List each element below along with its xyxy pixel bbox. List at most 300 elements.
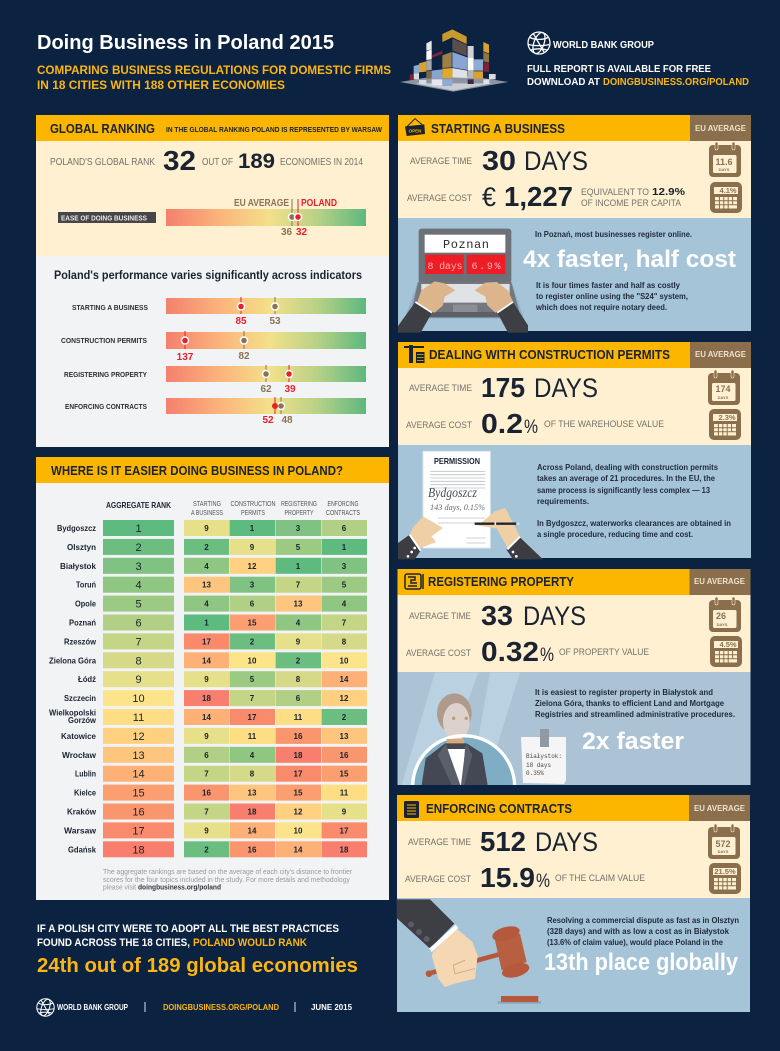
story text: It is easiest to register property in Białystok and bbox=[535, 688, 713, 697]
story text: It is four times faster and half as costly bbox=[536, 281, 681, 290]
column headers bbox=[106, 500, 360, 517]
sticky note bbox=[521, 729, 566, 784]
footer link: DOINGBUSINESS.ORG/POLAND bbox=[163, 1003, 279, 1012]
average cost bbox=[407, 181, 686, 212]
header bar bbox=[397, 795, 689, 821]
icon: property plan bbox=[405, 574, 423, 589]
EU average tab bbox=[690, 115, 751, 141]
story text: In Poznań, most businesses register online. bbox=[535, 230, 692, 239]
panel: starting a business bbox=[398, 115, 751, 333]
indicator: registering property: 39 bbox=[284, 384, 296, 395]
story text: Zielona Góra, thanks to efficient Land and Mortgage bbox=[535, 699, 725, 708]
row: Kielce: 11 bbox=[340, 789, 349, 798]
screen days text: 8 days bbox=[428, 261, 462, 273]
footnote: doingbusiness.org/poland bbox=[138, 884, 221, 892]
indicator: registering property: REGISTERING PROPERTY bbox=[64, 370, 147, 379]
row: Gdańsk: 2 bbox=[204, 845, 209, 854]
row: Lublin: Lublin bbox=[75, 769, 96, 779]
icon: EU time calendar: 572 bbox=[715, 839, 731, 849]
story text: which does not require notary deed. bbox=[535, 303, 667, 312]
heading: ENFORCING CONTRACTS bbox=[426, 801, 572, 816]
row: Zielona Góra: Zielona Góra bbox=[49, 655, 96, 665]
row: Szczecin: 18 bbox=[202, 694, 211, 703]
title: Doing Business in Poland 2015 bbox=[37, 32, 334, 54]
story text: 2x faster bbox=[582, 728, 684, 755]
row: Zielona Góra: 14 bbox=[202, 656, 211, 665]
row: Toruń: 5 bbox=[342, 581, 347, 590]
row: Wielkopolski Gorzów: 2 bbox=[342, 713, 347, 722]
row: Zielona Góra: 2 bbox=[296, 656, 301, 665]
average time: 512 bbox=[480, 826, 526, 857]
EU average label: EU AVERAGE bbox=[695, 349, 746, 359]
row: Wielkopolski Gorzów: 11 bbox=[133, 712, 144, 724]
row: Bydgoszcz: 9 bbox=[204, 524, 209, 533]
column headers: AGGREGATE RANK bbox=[106, 500, 172, 510]
header note: IN THE GLOBAL RANKING POLAND IS REPRESENTED BY WARSAW bbox=[166, 125, 383, 134]
row: Wielkopolski Gorzów: 11 bbox=[294, 713, 303, 722]
total economies: 189 bbox=[238, 150, 275, 173]
indicator: starting a business: 85 bbox=[235, 316, 247, 327]
row: Wrocław: 6 bbox=[204, 751, 209, 760]
icon: EU cost calculator: 21.5% bbox=[714, 867, 736, 876]
row: Kraków: 7 bbox=[204, 808, 209, 816]
icon: EU time calendar bbox=[709, 142, 741, 177]
average time: AVERAGE TIME bbox=[409, 383, 472, 394]
EU value: 36 bbox=[281, 227, 293, 238]
row: Rzeszów: 17 bbox=[202, 637, 211, 646]
icon: EU cost calculator: 4.1% bbox=[719, 186, 737, 195]
row: Gdańsk: 18 bbox=[132, 844, 145, 856]
sticky note: Białystok: bbox=[526, 753, 562, 760]
report note line 1: FULL REPORT IS AVAILABLE FOR FREE bbox=[527, 63, 711, 75]
EU average label: EU AVERAGE bbox=[694, 803, 745, 813]
panel header bbox=[36, 457, 389, 483]
callout: best practices: IF A POLISH CITY WERE TO ADOPT ALL THE BEST PRACTICES bbox=[37, 923, 339, 935]
row: Warsaw: 14 bbox=[248, 826, 257, 835]
row: Szczecin: 12 bbox=[340, 694, 349, 703]
illustration panel background bbox=[398, 672, 750, 785]
icon: EU cost calculator bbox=[710, 636, 742, 667]
suffix: ECONOMIES IN 2014 bbox=[280, 157, 363, 168]
row: Lublin: 17 bbox=[294, 770, 303, 779]
row: Bydgoszcz bbox=[57, 520, 367, 536]
sticky note: 18 days bbox=[526, 762, 551, 769]
stats background bbox=[398, 141, 751, 218]
header bar bbox=[398, 569, 690, 595]
story text bbox=[544, 916, 739, 976]
row: Toruń: 4 bbox=[135, 580, 142, 592]
average time: DAYS bbox=[524, 146, 588, 176]
row: Olsztyn: 9 bbox=[250, 543, 255, 552]
row: Zielona Góra: 10 bbox=[340, 656, 349, 665]
icon: globe bbox=[36, 998, 55, 1017]
row: Katowice: 16 bbox=[294, 732, 303, 741]
column headers: CONTRACTS bbox=[326, 510, 360, 517]
rank sentence bbox=[50, 145, 363, 176]
row: Opole: Opole bbox=[75, 599, 96, 609]
row: Zielona Góra: 10 bbox=[248, 656, 257, 665]
icon: EU time calendar bbox=[708, 824, 740, 859]
story text: Registries and streamlined administrative procedures. bbox=[535, 710, 735, 719]
story text: Resolving a commercial dispute as fast as in Olsztyn bbox=[547, 916, 739, 925]
icon: EU time calendar: 174 bbox=[715, 384, 731, 394]
story text: Across Poland, dealing with construction permits bbox=[537, 463, 719, 472]
row: Opole: 13 bbox=[294, 600, 303, 609]
indicator: enforcing contracts: 52 bbox=[262, 415, 274, 426]
row: Szczecin: 10 bbox=[132, 693, 145, 705]
EU marker bbox=[288, 199, 296, 226]
icon: EU cost calculator bbox=[710, 182, 742, 213]
icon: EU cost calculator: 2.3% bbox=[718, 413, 736, 422]
average time: DAYS bbox=[535, 827, 598, 857]
row: Poznań: 6 bbox=[135, 618, 142, 630]
row: Wielkopolski Gorzów: Gorzów bbox=[68, 715, 96, 725]
row: Olsztyn: 5 bbox=[296, 543, 301, 552]
average cost: % bbox=[524, 417, 538, 438]
story text: (13.6% of claim value), would place Poland in the bbox=[547, 938, 724, 947]
panel header bbox=[36, 115, 389, 141]
indicator: starting a business: STARTING A BUSINESS bbox=[72, 303, 148, 312]
heading: DEALING WITH CONSTRUCTION PERMITS bbox=[429, 347, 670, 362]
EU average tab bbox=[690, 569, 750, 595]
column headers: CONSTRUCTION bbox=[230, 501, 276, 508]
illustration: property officer bbox=[402, 672, 520, 785]
row: Opole: 4 bbox=[342, 600, 347, 609]
indicator: registering property: 62 bbox=[260, 384, 272, 395]
row: Poznań: 4 bbox=[296, 618, 301, 628]
footer date: JUNE 2015 bbox=[311, 1003, 353, 1012]
row: Kielce: 15 bbox=[132, 788, 145, 800]
Poland legend: POLAND bbox=[301, 198, 337, 209]
illustration panel background bbox=[397, 898, 750, 1012]
story text: 4x faster, half cost bbox=[523, 246, 736, 273]
row: Łódź: 14 bbox=[340, 675, 349, 684]
report note line 2: DOWNLOAD AT bbox=[527, 76, 601, 88]
sticky note: 0.35% bbox=[526, 770, 544, 777]
row: Bydgoszcz: 6 bbox=[342, 524, 347, 533]
average time: DAYS bbox=[534, 373, 598, 403]
row: Szczecin: 6 bbox=[296, 694, 301, 703]
row: Bydgoszcz: 1 bbox=[250, 524, 255, 533]
column headers: A BUSINESS bbox=[191, 510, 223, 517]
row: Poznań bbox=[69, 614, 367, 630]
indicator: enforcing contracts: ENFORCING CONTRACTS bbox=[65, 402, 147, 411]
EU average tab bbox=[689, 795, 750, 821]
panel body bbox=[36, 457, 389, 900]
row: Katowice: 12 bbox=[132, 731, 145, 743]
icon: contract document bbox=[404, 801, 419, 818]
row: Kraków: Kraków bbox=[67, 806, 96, 816]
icon: EU cost calculator bbox=[709, 863, 741, 894]
average time: AVERAGE TIME bbox=[409, 611, 471, 622]
row label text: EASE OF DOING BUSINESS bbox=[61, 214, 147, 222]
row: Warsaw: 10 bbox=[294, 826, 303, 835]
row: Warsaw: 17 bbox=[340, 826, 349, 835]
average cost bbox=[406, 636, 649, 667]
row: Olsztyn: Olsztyn bbox=[67, 542, 96, 552]
row: Warsaw: 17 bbox=[132, 825, 145, 837]
average cost: 0.2 bbox=[481, 408, 523, 439]
connector: OUT OF bbox=[202, 157, 233, 168]
row: Rzeszów: 9 bbox=[296, 637, 301, 646]
row: Opole: 6 bbox=[250, 600, 255, 609]
icon: colourful building logo bbox=[400, 29, 508, 92]
story text: 13th place globally bbox=[544, 949, 739, 976]
story text bbox=[537, 463, 731, 539]
average time bbox=[409, 600, 586, 631]
row: Białystok: 3 bbox=[135, 561, 142, 573]
icon: crane bbox=[404, 345, 424, 363]
icon: EU time calendar bbox=[709, 597, 741, 632]
average cost: AVERAGE COST bbox=[406, 420, 472, 431]
row: Gdańsk: 16 bbox=[248, 845, 257, 854]
average cost bbox=[405, 862, 645, 893]
rank number: 32 bbox=[163, 145, 196, 176]
ease of doing business chart bbox=[58, 198, 366, 238]
row: Poznań: Poznań bbox=[69, 618, 96, 628]
row: Lublin: 15 bbox=[340, 770, 349, 779]
indicator: enforcing contracts bbox=[65, 397, 366, 426]
row: Olsztyn bbox=[67, 539, 367, 555]
story text bbox=[535, 688, 735, 755]
footer bbox=[37, 998, 353, 1017]
row: Lublin: 7 bbox=[204, 770, 209, 779]
icon: EU time calendar: DAYS bbox=[718, 849, 729, 854]
icon: EU cost calculator bbox=[709, 409, 741, 440]
row: Warsaw bbox=[64, 822, 367, 838]
gray section bbox=[36, 256, 389, 447]
row: Kraków: 18 bbox=[248, 808, 257, 816]
story text bbox=[523, 230, 736, 312]
story text: a single procedure, reducing time and cost. bbox=[537, 530, 693, 539]
icon: EU time calendar bbox=[708, 370, 740, 405]
callout: best practices bbox=[37, 923, 358, 977]
story text: same process is significantly less complex — 13 bbox=[537, 486, 711, 495]
row: Katowice: Katowice bbox=[61, 731, 96, 741]
logo wordmark: WORLD BANK GROUP bbox=[553, 39, 654, 51]
row: Szczecin bbox=[64, 690, 367, 706]
average cost: OF INCOME PER CAPITA bbox=[581, 198, 682, 209]
row: Białystok: 1 bbox=[296, 562, 301, 571]
row: Warsaw: 9 bbox=[204, 826, 209, 835]
row: Rzeszów: Rzeszów bbox=[64, 636, 96, 646]
column headers: REGISTERING bbox=[281, 501, 317, 508]
cream section bbox=[36, 141, 389, 256]
row: Opole: 5 bbox=[135, 599, 142, 611]
row: Łódź: 9 bbox=[204, 675, 209, 684]
icon: EU time calendar: DAYS bbox=[717, 622, 728, 627]
average cost: % bbox=[540, 645, 554, 666]
story text: takes an average of 21 procedures. In the EU, the bbox=[537, 474, 716, 483]
callout: best practices: POLAND WOULD RANK bbox=[193, 937, 307, 949]
average cost: OF THE WAREHOUSE VALUE bbox=[544, 419, 664, 430]
icon: open sign bbox=[405, 119, 425, 136]
panel: construction permits bbox=[398, 342, 751, 559]
permit values: 143 days, 0.15% bbox=[430, 503, 485, 512]
stats background bbox=[398, 595, 750, 672]
footnote: scores for the four topics included in the study. For more details and methodology bbox=[103, 877, 350, 884]
average cost: 12.9% bbox=[652, 186, 686, 198]
illustration panel background bbox=[398, 445, 751, 558]
footnote bbox=[103, 869, 353, 892]
icon: open sign: OPEN bbox=[409, 129, 422, 135]
story text: requirements. bbox=[537, 497, 589, 506]
Poland value: 32 bbox=[296, 227, 308, 238]
row: Wrocław: 18 bbox=[294, 751, 303, 760]
row: Warsaw: Warsaw bbox=[64, 825, 96, 835]
row: Kraków: 16 bbox=[132, 806, 145, 818]
screen cost text: 6.9% bbox=[472, 262, 500, 273]
icon: EU time calendar: 11.6 bbox=[715, 157, 733, 167]
column headers: PERMITS bbox=[241, 510, 265, 517]
row: Zielona Góra bbox=[49, 652, 367, 668]
average cost: OF THE CLAIM VALUE bbox=[555, 873, 645, 884]
header bar bbox=[398, 342, 690, 368]
heading: WHERE IS IT EASIER DOING BUSINESS IN POLAND? bbox=[51, 463, 343, 478]
indicator: starting a business: 53 bbox=[269, 316, 281, 327]
row: Kraków: 9 bbox=[342, 808, 347, 816]
row: Bydgoszcz: 1 bbox=[135, 523, 142, 535]
average cost: 0.32 bbox=[481, 636, 539, 667]
row: Katowice: 13 bbox=[340, 732, 349, 741]
footnote: please visit bbox=[103, 884, 136, 892]
illustration panel background bbox=[398, 218, 751, 331]
row: Gdańsk bbox=[68, 841, 367, 857]
illustration: laptop and hands bbox=[398, 229, 528, 333]
row: Katowice bbox=[61, 728, 367, 744]
row: Wielkopolski Gorzów: 14 bbox=[202, 713, 211, 722]
indicator: starting a business bbox=[72, 297, 366, 327]
row: Toruń: Toruń bbox=[76, 580, 96, 590]
row: Wrocław: 4 bbox=[250, 751, 255, 760]
label: POLAND'S GLOBAL RANK bbox=[50, 157, 155, 168]
row: Łódź: 5 bbox=[250, 675, 255, 684]
average time: DAYS bbox=[523, 601, 586, 631]
average cost bbox=[406, 408, 664, 439]
row: Wielkopolski Gorzów bbox=[49, 708, 367, 725]
bar bbox=[166, 209, 366, 226]
World Bank logo and report note bbox=[527, 31, 749, 88]
row: Łódź: 9 bbox=[135, 674, 142, 686]
row: Łódź: 8 bbox=[296, 675, 301, 684]
row: Zielona Góra: 8 bbox=[135, 655, 142, 667]
subtitle line 2: IN 18 CITIES WITH 188 OTHER ECONOMIES bbox=[37, 78, 285, 92]
panel: enforcing contracts bbox=[397, 795, 750, 1012]
row: Wrocław: 16 bbox=[340, 751, 349, 760]
screen city text: Poznan bbox=[443, 238, 489, 252]
row: Olsztyn: 2 bbox=[135, 542, 142, 554]
subheading: Poland's performance varies significantly across indicators bbox=[54, 268, 362, 282]
EU legend: EU AVERAGE bbox=[234, 198, 289, 209]
row: Rzeszów: 7 bbox=[135, 636, 142, 648]
row: Katowice: 9 bbox=[204, 732, 209, 741]
row: Białystok: 12 bbox=[248, 562, 257, 571]
EU average tab bbox=[690, 342, 751, 368]
row: Białystok: 3 bbox=[342, 562, 347, 571]
footer logo wordmark: WORLD BANK GROUP bbox=[57, 1003, 129, 1012]
average time bbox=[410, 145, 588, 176]
column headers: PROPERTY bbox=[284, 510, 314, 517]
average time: AVERAGE TIME bbox=[410, 156, 472, 167]
callout: best practices: 24th out of 189 global economies bbox=[37, 955, 358, 977]
header bar bbox=[398, 115, 690, 141]
row: Białystok: Białystok bbox=[60, 561, 96, 571]
illustration: gavel in hand bbox=[397, 899, 541, 1004]
stats background bbox=[397, 821, 750, 898]
row: Poznań: 1 bbox=[204, 618, 209, 628]
indicator: enforcing contracts: 48 bbox=[281, 415, 293, 426]
row: Gdańsk: 18 bbox=[340, 845, 349, 854]
permit title: PERMISSION bbox=[434, 456, 480, 466]
row: Toruń: 3 bbox=[250, 581, 255, 590]
average time: 30 bbox=[482, 145, 516, 176]
row: Kielce: 15 bbox=[294, 789, 303, 798]
row: Bydgoszcz: Bydgoszcz bbox=[57, 523, 96, 533]
heading: STARTING A BUSINESS bbox=[431, 121, 565, 136]
average cost: % bbox=[536, 871, 550, 892]
row: Poznań: 15 bbox=[248, 618, 257, 628]
average time bbox=[409, 372, 598, 403]
row: Wielkopolski Gorzów: Wielkopolski bbox=[49, 708, 96, 718]
icon: globe bbox=[528, 31, 550, 55]
footnote: The aggregate rankings are based on the average of each city's distance to frontier bbox=[103, 869, 353, 876]
row: Rzeszów: 8 bbox=[342, 637, 347, 646]
row: Gdańsk: Gdańsk bbox=[68, 844, 96, 854]
EU average label: EU AVERAGE bbox=[694, 576, 745, 586]
panel: city table bbox=[36, 457, 389, 900]
EU average label: EU AVERAGE bbox=[695, 123, 746, 133]
row: Białystok: 4 bbox=[204, 562, 209, 571]
indicator: registering property bbox=[64, 365, 366, 395]
heading: REGISTERING PROPERTY bbox=[428, 574, 574, 589]
icon: EU time calendar: DAYS bbox=[718, 395, 729, 400]
row: Wrocław: 13 bbox=[132, 750, 145, 762]
average cost: AVERAGE COST bbox=[405, 874, 471, 885]
row: Toruń bbox=[76, 577, 367, 593]
average time: 175 bbox=[481, 372, 525, 403]
Poland marker bbox=[294, 199, 302, 226]
indicator: construction permits bbox=[61, 331, 366, 363]
average cost: 1,227 bbox=[504, 181, 573, 212]
row: Kraków: 12 bbox=[294, 808, 303, 816]
story text: (328 days) and with as low a cost as in Białystok bbox=[547, 927, 730, 936]
row: Rzeszów: 2 bbox=[250, 637, 255, 646]
panel: registering property bbox=[398, 569, 750, 785]
average cost: AVERAGE COST bbox=[407, 193, 472, 204]
average time: 33 bbox=[481, 600, 513, 631]
average time: AVERAGE TIME bbox=[408, 837, 471, 848]
row: Toruń: 7 bbox=[296, 581, 301, 590]
row: Lublin bbox=[75, 766, 367, 782]
average cost: EQUIVALENT TO bbox=[581, 187, 649, 198]
average cost: 15.9 bbox=[480, 862, 535, 893]
row: Lublin: 14 bbox=[132, 769, 145, 781]
row: Rzeszów bbox=[64, 633, 367, 649]
story text: In Bydgoszcz, waterworks clearances are obtained in bbox=[537, 519, 731, 528]
row: Kielce bbox=[74, 785, 367, 801]
row: Białystok bbox=[60, 558, 367, 574]
row: Łódź: Łódź bbox=[78, 674, 96, 684]
indicator: construction permits: 137 bbox=[177, 352, 194, 363]
average cost: AVERAGE COST bbox=[406, 648, 471, 659]
row: Kielce: 13 bbox=[248, 789, 257, 798]
story text: to register online using the "S24" system, bbox=[536, 292, 688, 301]
icon: EU time calendar: DAYS bbox=[719, 167, 730, 172]
row: Kielce: Kielce bbox=[74, 788, 96, 798]
row: Kielce: 16 bbox=[202, 789, 211, 798]
indicator: construction permits: 82 bbox=[238, 351, 250, 362]
row: Szczecin: Szczecin bbox=[64, 693, 96, 703]
